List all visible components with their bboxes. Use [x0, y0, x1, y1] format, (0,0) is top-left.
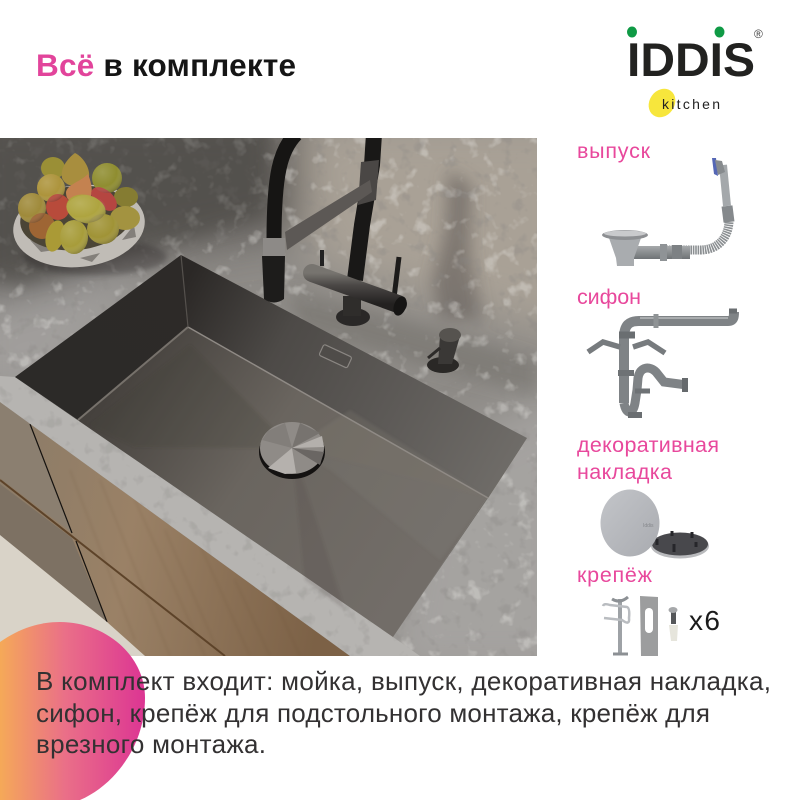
logo green dot left [627, 26, 637, 38]
item: decorative cover [577, 433, 719, 558]
logo wordmark: IDDIS [627, 33, 755, 86]
label: крепёж [577, 563, 653, 587]
faucet base [336, 308, 370, 326]
wood grain [70, 470, 300, 656]
title: Всё в комплекте [36, 47, 296, 83]
faucet joint [263, 238, 285, 256]
quantity: x6 [689, 605, 720, 636]
item: siphon [577, 285, 737, 415]
photo: kitchen sink [0, 110, 580, 680]
bowl interior [20, 186, 130, 250]
bowl marble veins [30, 225, 136, 262]
faucet bar end [394, 296, 406, 316]
sink edges [188, 327, 488, 498]
drain cover [259, 422, 325, 479]
decorative blob [0, 622, 145, 800]
floor facets [234, 412, 398, 608]
label: декоративная [577, 433, 719, 457]
kitchen wordmark: kitchen [662, 96, 720, 112]
cabinet fronts [0, 402, 350, 656]
sink bowl [15, 255, 527, 637]
logo green dot right [714, 26, 724, 38]
sink right wall [400, 446, 522, 628]
bowl [13, 184, 145, 268]
overflow plate [319, 344, 352, 368]
logo: IDDIS kitchen [627, 26, 763, 122]
faucet [262, 134, 461, 373]
soap dispenser [427, 328, 461, 373]
cover disc [600, 490, 660, 556]
item: fasteners [577, 563, 720, 656]
outlet illustration [602, 158, 729, 266]
description text: сифон, крепёж для подстольного монтажа, крепёж для [36, 698, 710, 728]
countertop and wall stone [0, 138, 537, 656]
description text: В комплект входит: мойка, выпуск, декоративная накладка, [36, 666, 771, 696]
cover brand mark: Iddis [643, 523, 654, 529]
label: сифон [577, 285, 641, 309]
lever left [320, 250, 324, 266]
description text [36, 666, 771, 759]
lever right [394, 257, 399, 298]
siphon illustration [588, 311, 737, 415]
cover underside [651, 531, 709, 558]
fruit bowl [9, 153, 167, 275]
faucet spray head [262, 256, 285, 302]
label line two: накладка [577, 460, 672, 484]
screw and dowel [668, 607, 678, 641]
clamp [603, 597, 629, 655]
pears [18, 153, 140, 254]
stone front edge [0, 370, 420, 656]
faucet tall body [355, 134, 374, 280]
yellow spot [643, 84, 681, 122]
item: drain outlet [577, 139, 729, 266]
registered mark: ® [754, 27, 763, 41]
sink floor [15, 327, 527, 637]
dark stone overlay upper left [0, 120, 270, 285]
sink back wall [181, 255, 527, 498]
faucet hose [274, 134, 296, 240]
label: выпуск [577, 139, 651, 163]
faucet arm [285, 180, 372, 250]
fixing plate [640, 596, 658, 656]
sink left wall [15, 255, 188, 420]
bowl shadow [23, 239, 167, 275]
description text: врезного монтажа. [36, 729, 266, 759]
floor tile [0, 535, 145, 656]
faucet collar [358, 160, 379, 205]
faucet cross bar [312, 273, 398, 304]
